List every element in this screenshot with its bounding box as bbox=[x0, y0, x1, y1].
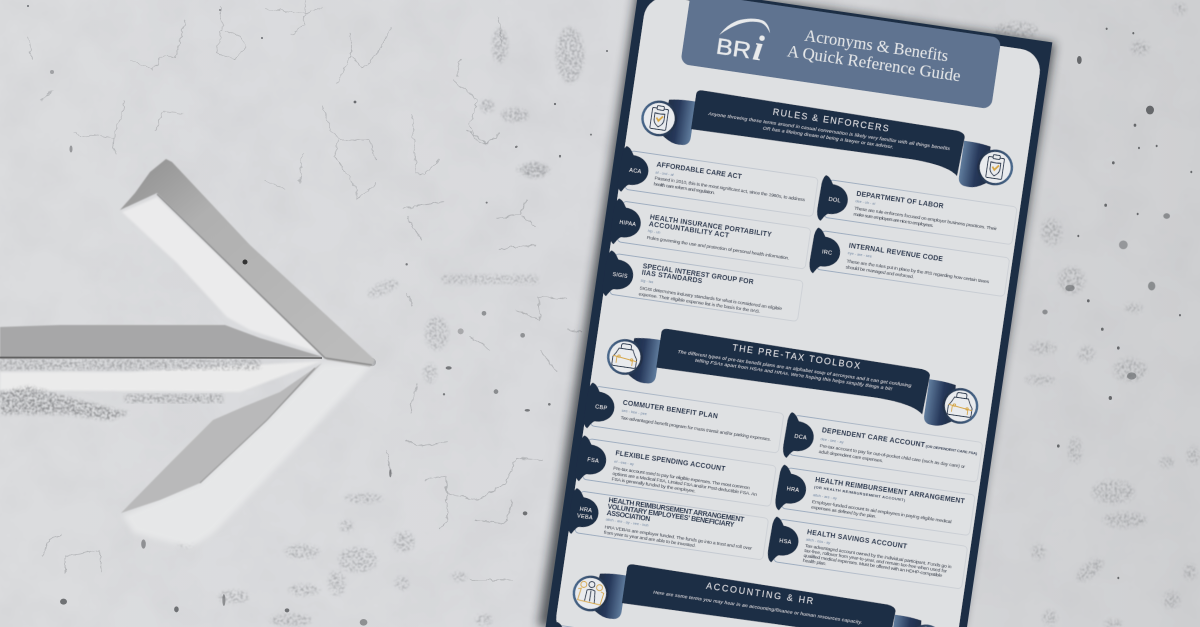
card: DOL bbox=[816, 175, 1018, 249]
card: SIGIS: expense. Their eligible expense list is the basis for the IIAS. bbox=[638, 291, 761, 315]
card: HRA VEBA: ASSOCIATION bbox=[606, 510, 651, 523]
card: HRA bbox=[774, 464, 976, 538]
section ribbon: accounting and hr bbox=[570, 556, 949, 627]
card: DCA: DEPENDENT CARE ACCOUNT bbox=[821, 427, 926, 449]
card: ACA: af - ord - af bbox=[655, 170, 675, 177]
card: SIGIS: SIGIS determines industry standards for what is considered an eligible bbox=[639, 285, 783, 312]
card: DCA: adult dependent care expenses. bbox=[818, 449, 883, 464]
arrow upper barb bbox=[120, 159, 375, 367]
heading: the pre-tax toolbox: THE PRE-TAX TOOLBOX bbox=[732, 342, 861, 371]
intro text: rules: Anyone throwing these terms around in casual conversation is likely very familiar with all things benefits bbox=[707, 111, 951, 152]
etched arrow in concrete bbox=[0, 159, 375, 548]
card: ACA: Passed in 2010, this is the most significant act, since the 1960s, to address bbox=[654, 175, 806, 203]
card: FSA: options are a Medical FSA, Limited FSA and/or Post-deductible FSA. An bbox=[612, 471, 758, 498]
card: DOL: make sure employers are nice to employees. bbox=[853, 212, 934, 229]
intro text: toolbox: telling FSAs apart from HSAs and HRAs. We're hoping this helps simplify things a bit! bbox=[695, 358, 893, 392]
card: SIGIS: IIAS STANDARDS bbox=[641, 269, 703, 285]
arrow shaft lower bright channel bbox=[0, 361, 322, 392]
card: HRA: HRA bbox=[786, 486, 800, 494]
card: ACA: AFFORDABLE CARE ACT bbox=[656, 162, 743, 181]
card: HRA VEBA: from year to year and are able to be invested. bbox=[603, 530, 696, 549]
card: DCA: Pre-tax account to pay for out-of-pocket child care (such as day care) or bbox=[819, 443, 966, 470]
poster drop shadow bbox=[538, 0, 1055, 627]
card: HSA: aitch - ess - ay bbox=[806, 538, 831, 545]
card: HSA: tax-free, rollover from year-to-year, and remain tax-free when used for bbox=[804, 548, 948, 575]
dirt patches bottom wall bbox=[176, 494, 493, 626]
heading: accounting and hr: ACCOUNTING & HR bbox=[706, 581, 814, 606]
header banner bbox=[680, 0, 1001, 109]
card: DCA: (OR DEPENDENT CARE FSA) bbox=[925, 443, 978, 456]
section ribbon: the pre-tax toolbox bbox=[604, 321, 983, 431]
card: DOL: DEPARTMENT OF LABOR bbox=[856, 191, 944, 210]
card: HRA VEBA: VEBA bbox=[576, 513, 593, 522]
specks right wall bbox=[1042, 28, 1192, 579]
card: FSA: FLEXIBLE SPENDING ACCOUNT bbox=[615, 450, 726, 473]
card: IRC: These are the rules put in place by the IRS regarding how certain taxes bbox=[846, 259, 990, 285]
BRi logo bbox=[714, 14, 772, 69]
card: CBP: CBP bbox=[595, 404, 608, 412]
smudges mid wall bbox=[366, 163, 550, 383]
arrow lower bright facet bbox=[122, 362, 375, 548]
card: HIPAA bbox=[609, 198, 811, 272]
specks bottom wall bbox=[60, 469, 527, 626]
icon: clipboard left bbox=[639, 98, 680, 139]
card: HRA: Employer-funded account to aid employees in paying eligible medical bbox=[812, 499, 952, 525]
cracks mid wall bbox=[403, 130, 583, 413]
arrow upper bright facet bbox=[122, 197, 320, 353]
icon: toolbox left bbox=[605, 337, 645, 377]
card: FSA: FSA is generally funded by the employee. bbox=[611, 476, 696, 495]
card: SIGIS: SPECIAL INTEREST GROUP FOR bbox=[642, 263, 754, 286]
header title: A Quick Reference Guide bbox=[786, 41, 962, 85]
card: HIPAA: HIPAA bbox=[619, 220, 637, 228]
intro text: accounting: Here are some terms you may hear in an accounting/finance or human resources capacity. bbox=[653, 590, 862, 626]
smudges top centre bbox=[480, 27, 584, 178]
card: CBP: COMMUTER BENEFIT PLAN bbox=[622, 400, 718, 420]
arrow shaft stipple bbox=[0, 359, 260, 370]
card: HRA VEBA: HEALTH REIMBURSEMENT ARRANGEMENT bbox=[608, 497, 745, 524]
arrow lower barb edge bbox=[200, 368, 315, 483]
intro text: toolbox: The different types of pre-tax benefit plans are an alphabet soup of acronyms and it can get confusing bbox=[677, 349, 912, 389]
hairline cracks, top left wall bbox=[29, 0, 502, 200]
poster bbox=[540, 0, 1052, 627]
card: ACA: ACA bbox=[629, 168, 642, 175]
specks mid wall bbox=[368, 134, 592, 412]
card: IRC: eye - are - see bbox=[847, 251, 872, 259]
card: HRA VEBA: HRA VEBAs are employer funded. The funds go into a trust and roll over bbox=[604, 524, 753, 552]
card: SIGIS: SIGIS bbox=[612, 272, 628, 280]
card: HSA bbox=[766, 516, 968, 590]
arrow lower barb bbox=[121, 363, 322, 513]
card: ACA bbox=[616, 145, 819, 220]
card: HRA VEBA: HRA bbox=[579, 507, 593, 515]
card: HSA: HSA bbox=[779, 538, 792, 546]
card: HSA: Tax-advantaged account owned by the individual participant. Funds go in bbox=[805, 543, 952, 570]
card: HIPAA: HEALTH INSURANCE PORTABILITY bbox=[649, 214, 772, 239]
card: CBP: Tax-advantaged benefit program for mass transit and/or parking expenses. bbox=[620, 415, 771, 443]
heading: rules and enforcers: RULES & ENFORCERS bbox=[772, 107, 889, 134]
BRi logo: BR bbox=[714, 34, 753, 63]
card: HRA: aitch - are - ay bbox=[813, 493, 837, 501]
card: HSA: qualified medical expenses. Must be offered with an HDHP-compatible bbox=[803, 553, 943, 579]
card: DOL: dee - oh - el bbox=[855, 199, 876, 206]
dirt patches right wall bbox=[995, 4, 1200, 627]
arrow barb ridge bbox=[157, 194, 372, 365]
icon: people right bbox=[905, 622, 946, 627]
header title: Acronyms & Benefits bbox=[803, 26, 950, 66]
icon: people left bbox=[570, 573, 611, 614]
card: DCA bbox=[782, 412, 983, 486]
card: SIGIS: sig - iss bbox=[640, 278, 654, 284]
card: HSA: health plan. bbox=[802, 558, 827, 567]
card: HIPAA: hip - uh bbox=[648, 229, 661, 235]
card: ACA: health care reform and regulation. bbox=[653, 181, 715, 196]
arrow shaft dark line bbox=[0, 356, 322, 359]
card: IRC: should be managed and enforced. bbox=[845, 264, 914, 280]
card: accounting row partial bbox=[547, 621, 749, 627]
BRi logo: i bbox=[751, 28, 766, 69]
icon: toolbox right bbox=[940, 386, 981, 426]
card: DOL: These are rule enforcers focused on employer business practices. Their bbox=[854, 206, 998, 232]
specks top left bbox=[27, 5, 608, 157]
cracks bottom wall bbox=[42, 440, 543, 580]
card: HRA: expenses as defined by the plan. bbox=[811, 504, 877, 520]
card: IRC: IRC bbox=[821, 249, 833, 257]
card: HRA: (OR HEALTH REIMBURSEMENT ACCOUNT) bbox=[814, 484, 906, 503]
card: DCA: DCA bbox=[794, 434, 807, 442]
card: HSA: HEALTH SAVINGS ACCOUNT bbox=[806, 529, 908, 551]
card: HRA VEBA: VOLUNTARY EMPLOYEES' BENEFICIARY bbox=[607, 504, 735, 529]
card: DOL: DOL bbox=[828, 197, 841, 205]
card: CBP bbox=[582, 382, 784, 456]
card: FSA: ef - ess - ay bbox=[614, 460, 634, 466]
arrow shaft bbox=[0, 325, 323, 359]
card: FSA bbox=[574, 435, 777, 509]
section ribbon: rules and enforcers bbox=[638, 82, 1018, 193]
card: HRA: HEALTH REIMBURSEMENT ARRANGEMENT bbox=[815, 477, 966, 506]
card: HRA VEBA: aitch - are - ay - vee - buh bbox=[605, 517, 649, 528]
card: HIPAA: ACCOUNTABILITY ACT bbox=[648, 221, 730, 240]
card: HRA VEBA bbox=[566, 488, 769, 562]
card: FSA: FSA bbox=[587, 457, 599, 465]
card: DCA: dee - see - ay bbox=[820, 437, 844, 444]
card: IRC bbox=[808, 227, 1010, 301]
arrow shaft dirt bbox=[0, 386, 130, 420]
icon: clipboard right bbox=[975, 147, 1016, 188]
card: CBP: see - bee - pee bbox=[621, 408, 647, 416]
card: SIGIS bbox=[601, 250, 804, 324]
card: FSA: Pre-tax account used to pay for eligible expenses. The most common bbox=[613, 465, 750, 491]
card: IRC: INTERNAL REVENUE CODE bbox=[848, 243, 944, 263]
card: HIPAA: Rules governing the use and protection of personal health information. bbox=[646, 235, 790, 262]
intro text: rules: OR has a lifelong dream of being a lawyer or tax advisor. bbox=[762, 126, 894, 151]
